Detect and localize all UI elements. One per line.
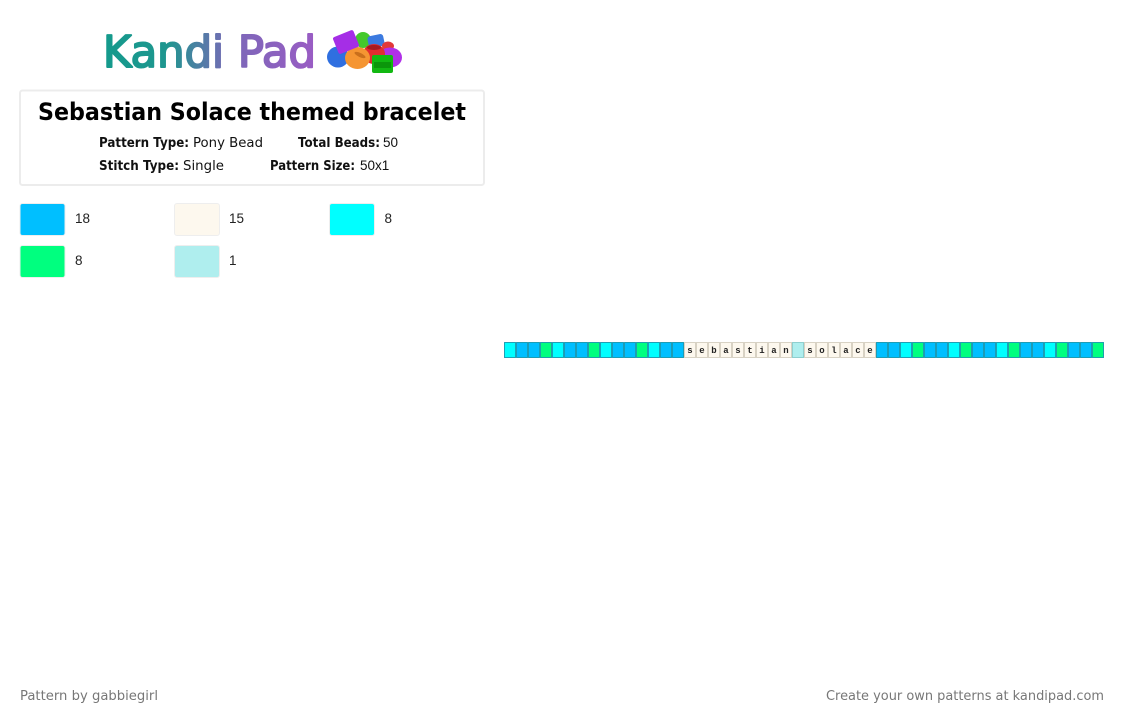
bead letters [687, 346, 873, 356]
bead letters: a [723, 346, 729, 356]
bead letters: s [687, 346, 693, 356]
pattern type [99, 136, 263, 151]
bead letters: s [735, 346, 741, 356]
panel: pattern info [20, 90, 484, 185]
swatch: blue 18 [20, 204, 90, 236]
footer: pattern credit: Pattern by gabbiegirl [20, 689, 158, 704]
bead letters: a [771, 346, 777, 356]
icon: pile of beads [327, 30, 402, 73]
bead letters: t [747, 346, 753, 356]
pattern size: 50x1 [360, 158, 389, 173]
bead letters: c [855, 346, 861, 356]
swatch: green 8: 8 [75, 253, 83, 268]
swatch: cyan 8: 8 [384, 211, 392, 226]
bead letters: o [819, 346, 825, 356]
stitch type: Stitch Type: [99, 159, 179, 174]
title: Sebastian Solace themed bracelet [38, 98, 466, 126]
bead letters: a [843, 346, 849, 356]
logo [103, 27, 402, 78]
total beads: Total Beads: [298, 136, 380, 151]
bead letters: l [831, 346, 837, 356]
bead letters: e [867, 346, 873, 356]
bead pattern strip [504, 342, 1104, 358]
swatch: green 8 [20, 246, 83, 278]
total beads: 50 [383, 135, 398, 150]
bead letters: b [711, 346, 717, 356]
swatch: cream 15 [174, 204, 244, 236]
swatch: blue 18: 18 [75, 211, 90, 226]
stitch type: Single [183, 159, 224, 174]
logo wordmark: Kandi Pad [103, 27, 316, 78]
stitch type [99, 159, 224, 174]
pattern type: Pattern Type: [99, 136, 189, 151]
pattern type: Pony Bead [193, 136, 263, 151]
swatch: cream 15: 15 [229, 211, 244, 226]
swatch: pale turquoise 1: 1 [229, 253, 237, 268]
bead letters: s [807, 346, 813, 356]
pattern size: Pattern Size: [270, 159, 355, 174]
bead letters: n [783, 346, 789, 356]
legend: colour counts [20, 204, 392, 278]
bead letters: i [759, 346, 765, 356]
bead letters: e [699, 346, 705, 356]
footer: site credit: Create your own patterns at kandipad.com [826, 689, 1104, 704]
swatch: pale turquoise 1 [174, 246, 237, 278]
swatch: cyan 8 [330, 204, 392, 236]
